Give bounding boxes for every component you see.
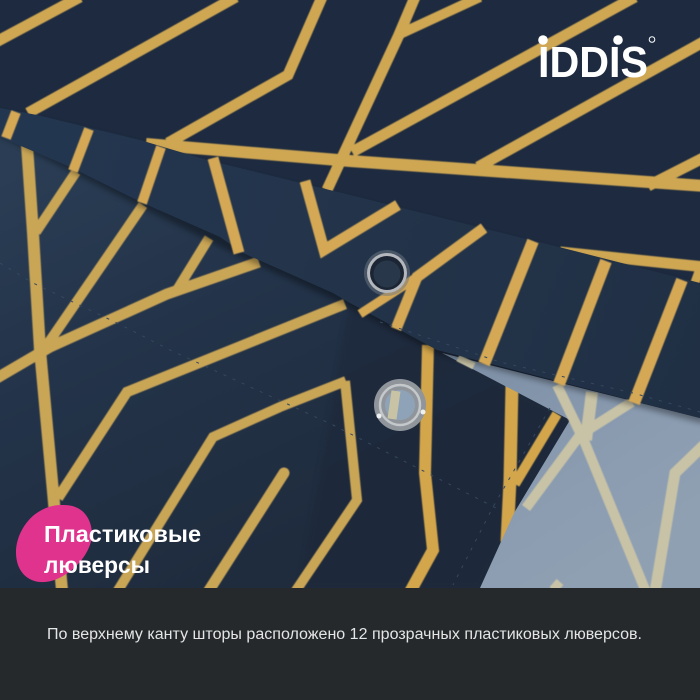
pale reverse pattern [458,358,700,592]
heading: люверсы [44,552,150,578]
footer bar [0,588,700,700]
heading [44,521,201,578]
lower fabric layer [0,130,570,592]
heading: Пластиковые [44,521,201,547]
back fabric layer [0,0,700,406]
pink blob accent [16,505,92,582]
eyelet: lower grommet [374,379,426,431]
hem gold pattern [6,112,682,403]
stitching seams [0,263,700,585]
hem with grommets [0,108,700,424]
grey reverse side of the curtain [442,353,700,592]
lower layer gold pattern [0,145,557,592]
logo: IDDIS: IDDIS [538,38,648,87]
eyelet: upper grommet [364,250,410,296]
description text: По верхнему канту шторы расположено 12 прозрачных пластиковых люверсов. [47,626,642,643]
back layer gold pattern [0,0,700,288]
